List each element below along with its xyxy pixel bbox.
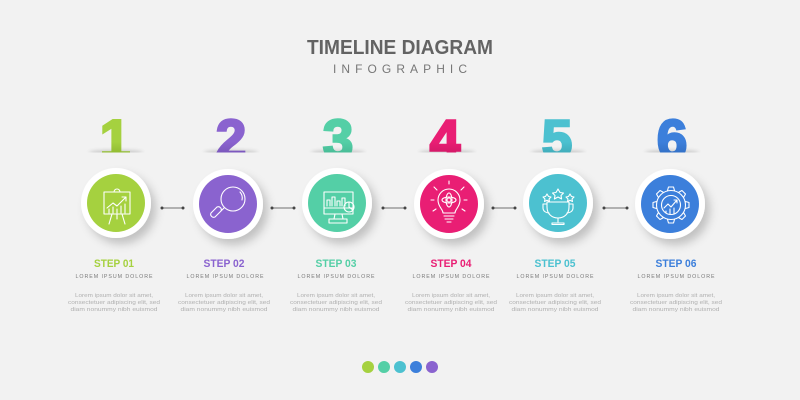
description 2: consectetuer adipiscing elit, sed bbox=[178, 300, 270, 306]
circle 1 bbox=[81, 168, 151, 238]
number 3: 3 bbox=[323, 108, 353, 170]
description 2 bbox=[178, 293, 270, 313]
description 5: diam nonummy nibh euismod bbox=[512, 307, 598, 313]
description 4: diam nonummy nibh euismod bbox=[408, 307, 494, 313]
label step 2: STEP 02 bbox=[204, 258, 244, 270]
title: TIMELINE DIAGRAM bbox=[307, 37, 493, 59]
circle 2 bbox=[193, 169, 263, 239]
icon: monitor dashboard bbox=[324, 192, 354, 223]
connector 1 bbox=[160, 206, 184, 210]
connector 3 bbox=[382, 206, 406, 210]
step 3 bbox=[290, 108, 382, 313]
sublabel 6: LOREM IPSUM DOLORE bbox=[638, 274, 715, 280]
step 5 bbox=[509, 108, 601, 313]
icon: light bulb bbox=[431, 181, 467, 222]
pagination dots bbox=[362, 361, 438, 373]
description 5: Lorem ipsum dolor sit amet, bbox=[516, 293, 595, 299]
connector 5 bbox=[602, 206, 628, 210]
description 3: diam nonummy nibh euismod bbox=[292, 307, 380, 313]
description 3 bbox=[290, 293, 382, 313]
description 2: diam nonummy nibh euismod bbox=[180, 307, 268, 313]
connector 2 bbox=[270, 206, 296, 210]
icon: gear with growth chart bbox=[653, 187, 689, 223]
number 4: 4 bbox=[430, 108, 461, 170]
connector 4 bbox=[492, 206, 516, 210]
number 5: 5 bbox=[542, 108, 572, 170]
description 1: Lorem ipsum dolor sit amet, bbox=[75, 293, 154, 299]
step 1 bbox=[68, 108, 160, 313]
icon: presentation chart bbox=[104, 189, 130, 224]
description 2: Lorem ipsum dolor sit amet, bbox=[185, 293, 264, 299]
step 2 bbox=[178, 108, 270, 313]
description 6: Lorem ipsum dolor sit amet, bbox=[637, 293, 716, 299]
description 1: diam nonummy nibh euismod bbox=[70, 307, 158, 313]
label step 3: STEP 03 bbox=[316, 258, 356, 270]
icon: trophy with stars bbox=[543, 189, 574, 224]
description 3: consectetuer adipiscing elit, sed bbox=[290, 300, 382, 306]
step 6 bbox=[630, 108, 722, 313]
number 6: 6 bbox=[657, 108, 687, 170]
label step 1: STEP 01 bbox=[94, 258, 134, 270]
sublabel 3: LOREM IPSUM DOLORE bbox=[298, 274, 375, 280]
label step 5: STEP 05 bbox=[534, 258, 576, 270]
label step 6: STEP 06 bbox=[656, 258, 696, 270]
circle 6 bbox=[635, 169, 705, 239]
description 6: diam nonummy nibh euismod bbox=[632, 307, 720, 313]
description 3: Lorem ipsum dolor sit amet, bbox=[297, 293, 376, 299]
description 1: consectetuer adipiscing elit, sed bbox=[68, 300, 160, 306]
number 2: 2 bbox=[216, 108, 246, 170]
sublabel 2: LOREM IPSUM DOLORE bbox=[186, 274, 264, 280]
sublabel 1: LOREM IPSUM DOLORE bbox=[76, 274, 153, 280]
circle 5 bbox=[523, 168, 593, 238]
description 6 bbox=[630, 293, 722, 313]
description 4: consectetuer adipiscing elit, sed bbox=[405, 300, 497, 306]
description 5 bbox=[509, 293, 601, 313]
description 5: consectetuer adipiscing elit, sed bbox=[509, 300, 601, 306]
description 1 bbox=[68, 293, 160, 313]
circle 3 bbox=[302, 168, 372, 238]
label step 4: STEP 04 bbox=[430, 258, 472, 270]
sublabel 4: LOREM IPSUM DOLORE bbox=[412, 274, 490, 280]
subtitle: INFOGRAPHIC bbox=[333, 62, 467, 76]
sublabel 5: LOREM IPSUM DOLORE bbox=[516, 274, 594, 280]
description 6: consectetuer adipiscing elit, sed bbox=[630, 300, 722, 306]
icon: magnifier bbox=[211, 187, 245, 217]
description 4: Lorem ipsum dolor sit amet, bbox=[412, 293, 491, 299]
step 4 bbox=[405, 108, 497, 313]
circle 4 bbox=[414, 169, 484, 239]
number 1: 1 bbox=[100, 108, 130, 170]
description 4 bbox=[405, 293, 497, 313]
